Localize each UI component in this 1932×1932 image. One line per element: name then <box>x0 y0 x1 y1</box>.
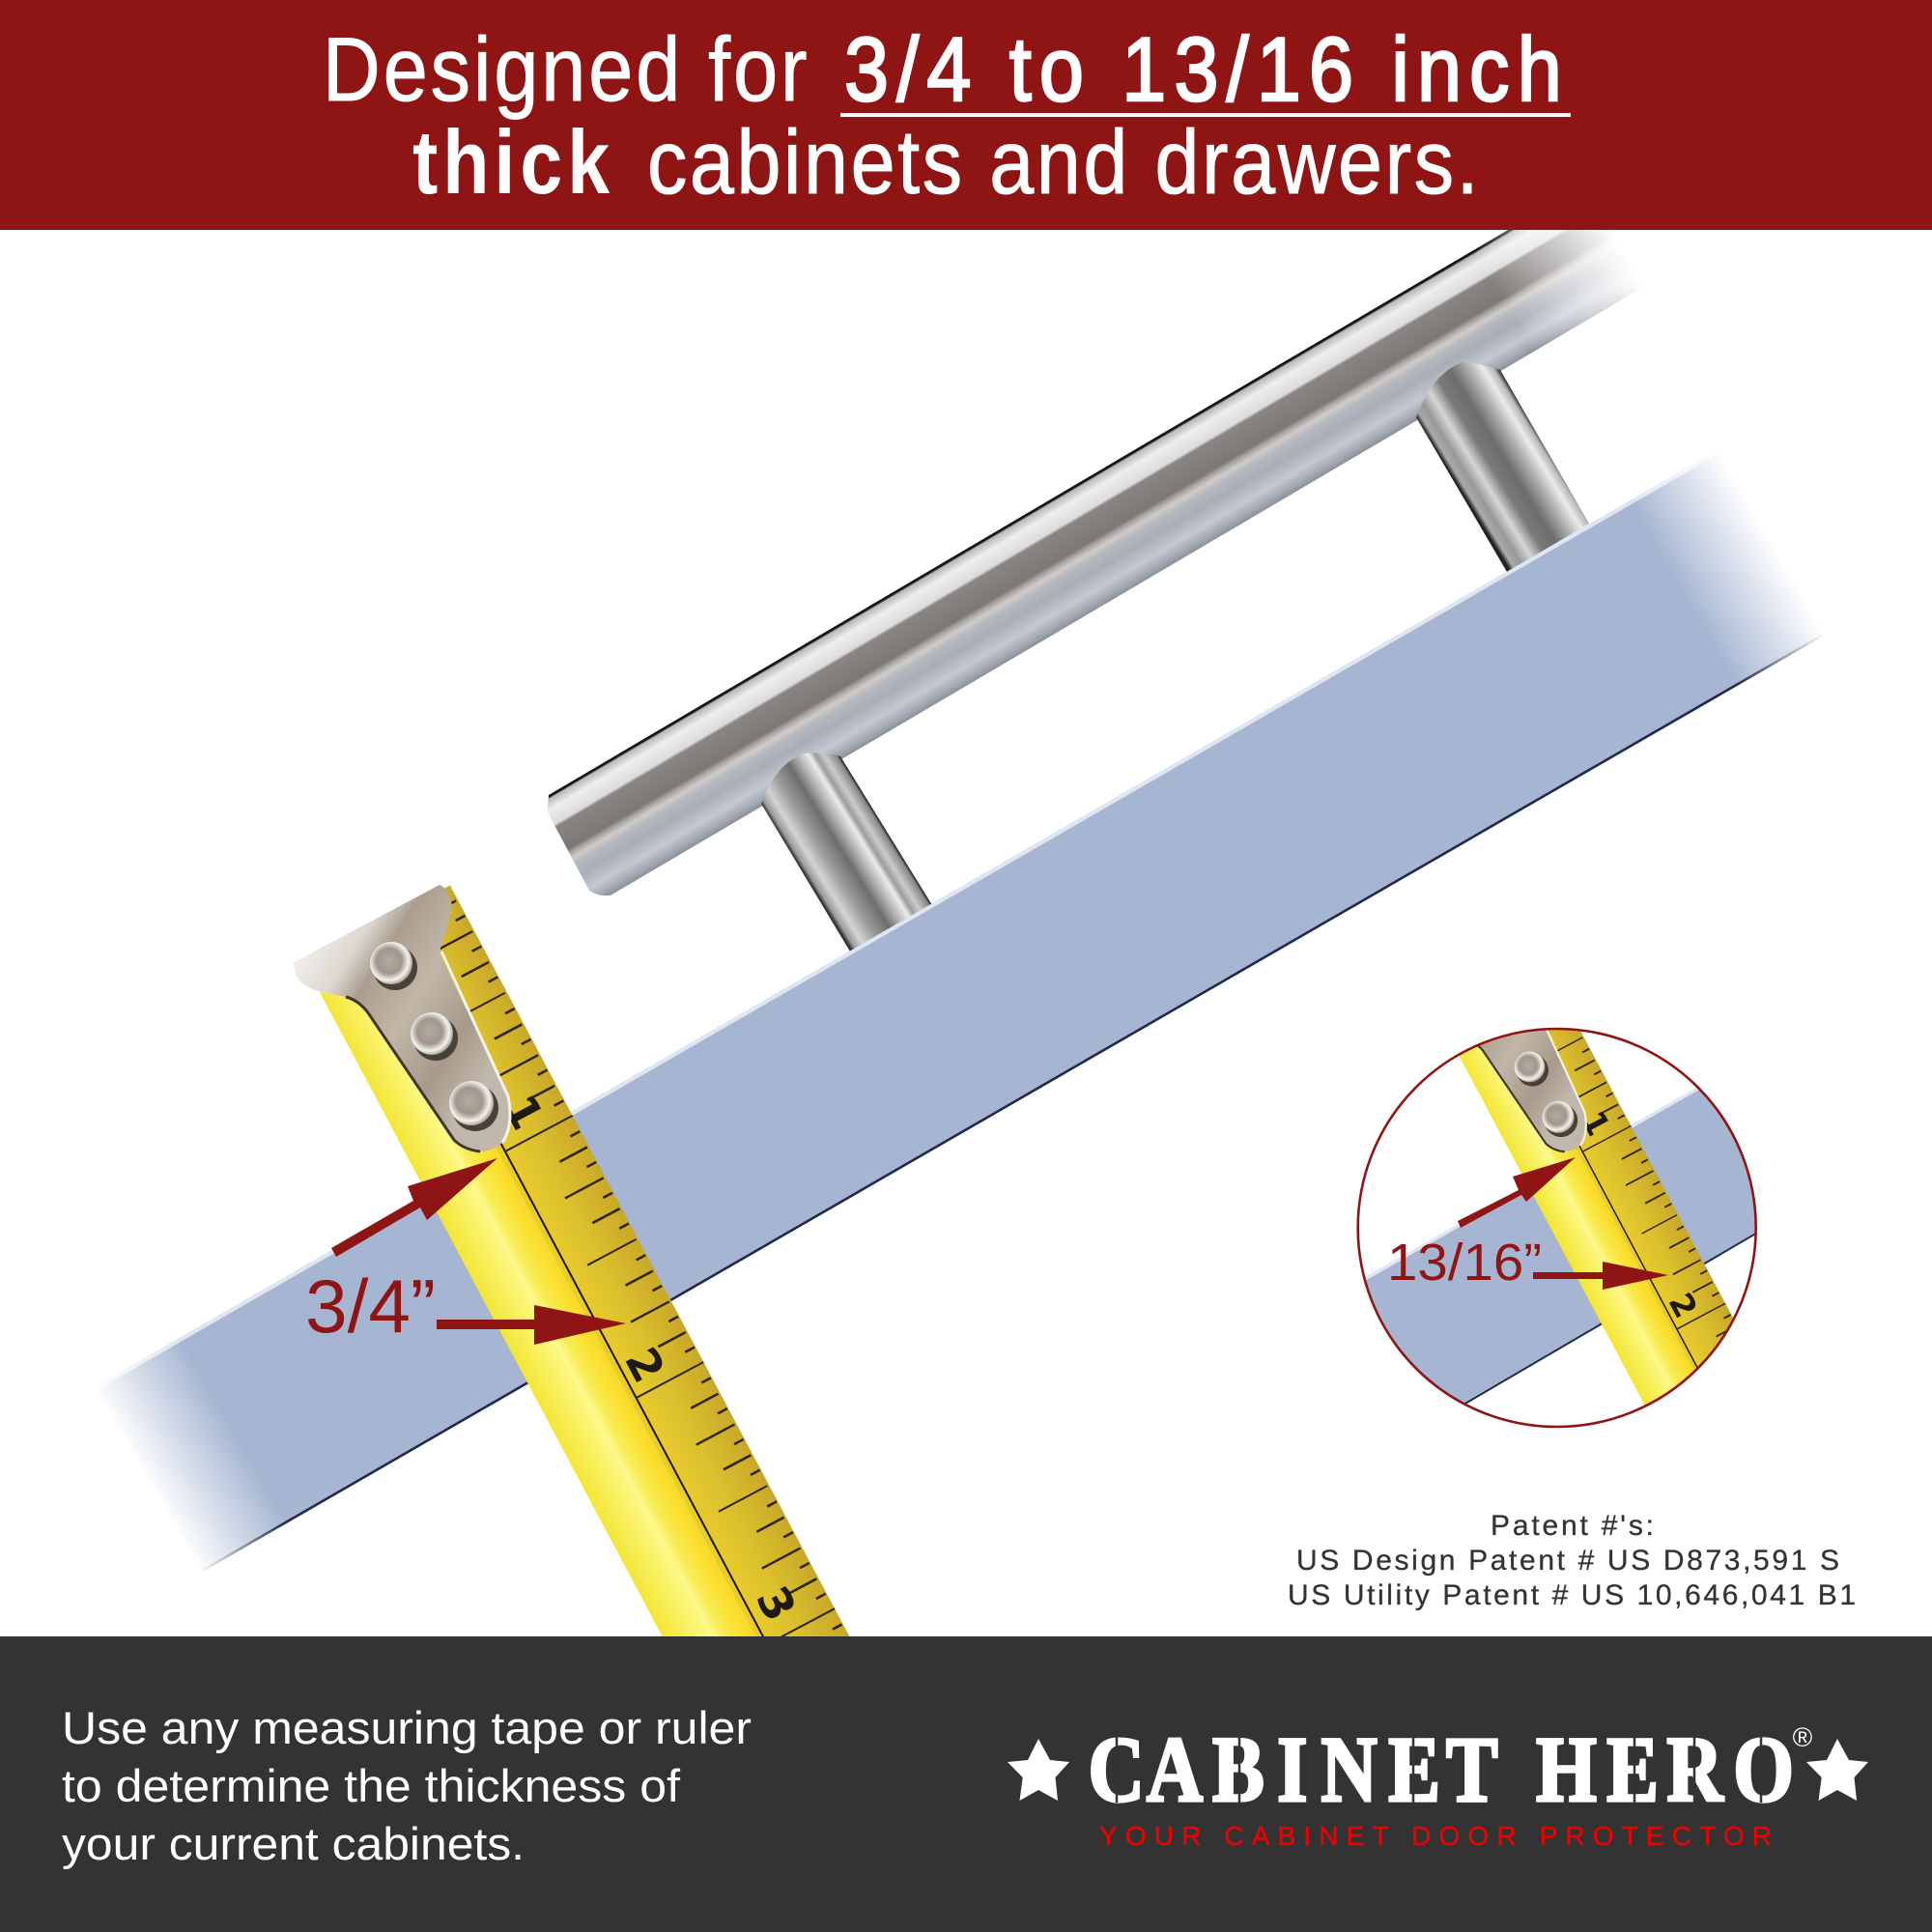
inset detail circle <box>1356 1028 1757 1428</box>
logo <box>1008 1719 1868 1851</box>
logo: ® <box>1793 1722 1813 1752</box>
label 3/4 inch: 3/4” <box>305 1264 436 1349</box>
header title: thick <box>412 112 611 213</box>
cabinet handle bar <box>535 148 1704 907</box>
cabinet handle post right <box>1416 362 1589 572</box>
inset detail circle: 13/16” <box>1387 1234 1542 1292</box>
measuring tape: 3 <box>746 1577 807 1630</box>
inset detail circle: 2 <box>1662 1287 1705 1324</box>
patent text: US Design Patent # US D873,591 S <box>1296 1545 1839 1577</box>
footer instructions <box>62 1702 752 1869</box>
header title: cabinets and drawers. <box>647 111 1479 213</box>
logo: YOUR CABINET DOOR PROTECTOR <box>1099 1821 1772 1851</box>
measuring tape <box>304 885 903 1816</box>
patent text: Patent #'s: <box>1491 1510 1654 1542</box>
measuring tape: 1 <box>494 1086 554 1138</box>
header banner <box>0 0 1932 230</box>
footer instructions: your current cabinets. <box>62 1818 525 1869</box>
logo: CABINET HERO <box>1088 1719 1794 1822</box>
arrow to two inch mark <box>437 1305 626 1345</box>
cabinet handle post left <box>761 753 932 952</box>
footer banner <box>0 1636 1932 1932</box>
tape hook <box>293 885 511 1151</box>
header title: Designed for <box>323 18 808 120</box>
patent text: US Utility Patent # US 10,646,041 B1 <box>1288 1579 1856 1611</box>
patent text <box>1288 1510 1856 1611</box>
inset detail circle: 1 <box>1574 1105 1618 1142</box>
footer instructions: Use any measuring tape or ruler <box>62 1702 752 1753</box>
header title: 3/4 to 13/16 inch <box>844 18 1562 120</box>
footer instructions: to determine the thickness of <box>62 1760 681 1811</box>
arrow to tape start <box>331 1158 497 1257</box>
cabinet door panel <box>69 432 1853 1590</box>
header title <box>323 18 1571 213</box>
measuring tape: 2 <box>614 1339 675 1391</box>
